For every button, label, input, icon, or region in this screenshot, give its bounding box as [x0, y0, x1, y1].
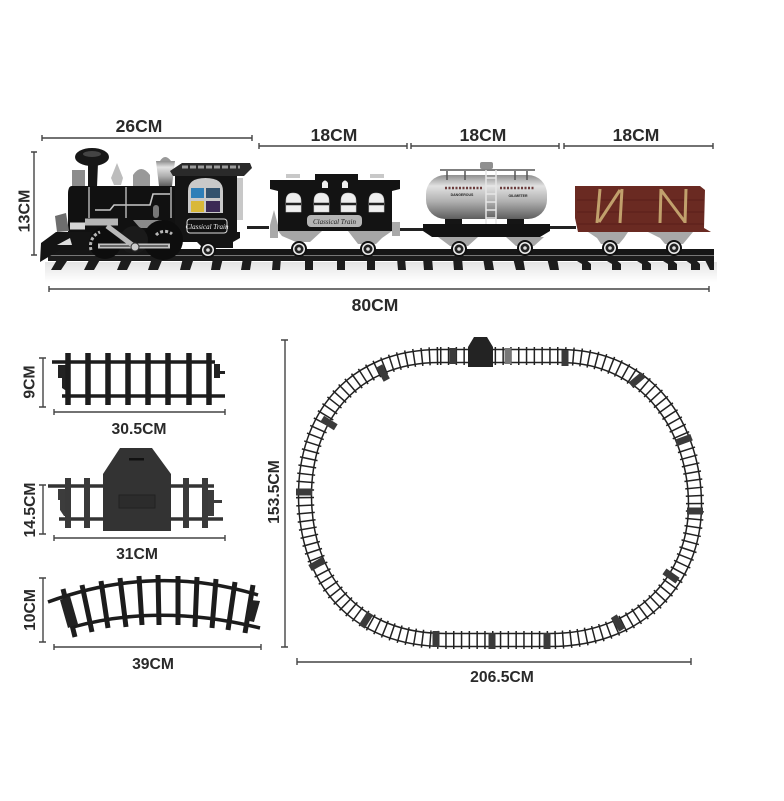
wood planks: [577, 200, 704, 224]
dimension: passenger car 18CM: 18CM: [311, 125, 357, 145]
wagon wheels: [602, 240, 682, 256]
coupler: [550, 226, 576, 229]
outer rail: [298, 350, 702, 646]
top rail: [440, 170, 535, 180]
passenger car: [270, 174, 400, 257]
dimension: train length 80CM: [49, 286, 709, 315]
boiler fittings: [89, 157, 175, 228]
dimension: oval height 153.5CM: [266, 340, 288, 647]
front lantern detail: [55, 213, 69, 232]
car end platforms: [270, 210, 400, 238]
hazard markings: DANGEROUS: [451, 193, 474, 197]
car name plate: Classical Train: [313, 218, 356, 226]
straight track piece: [52, 353, 225, 405]
roof highlight: [182, 166, 240, 168]
oval track layout: [296, 337, 703, 649]
dimension: connector track height 14.5CM: 14.5CM: [22, 483, 39, 537]
power connector track piece: [48, 448, 223, 531]
dimension: curved track width 39CM: [54, 644, 261, 673]
dimension: tank car 18CM: [411, 125, 559, 149]
car roof: [270, 174, 400, 231]
hazard markings: [445, 188, 535, 198]
connector housing: [103, 448, 171, 531]
roof vents: [286, 174, 384, 188]
boiler: [68, 186, 176, 232]
cab window: [188, 178, 223, 213]
cab name plate: [186, 219, 229, 233]
curved track piece: [48, 575, 260, 637]
dimension: box car 18CM: [564, 125, 713, 149]
ties: [305, 356, 695, 640]
locomotive chassis and cowcatcher: [40, 232, 240, 262]
wagon chassis: [588, 232, 693, 244]
tank car wheels: [451, 240, 533, 257]
cab: [175, 172, 237, 234]
smokestack: [72, 148, 109, 188]
dimension: oval width 206.5CM: [297, 658, 691, 686]
housing details: [119, 495, 155, 508]
tank car chassis: [438, 237, 544, 246]
dimension: box car 18CM: 18CM: [613, 125, 659, 145]
dimension: train length 80CM: 80CM: [352, 295, 398, 315]
locomotive: [40, 148, 252, 262]
power connector on oval: [468, 337, 493, 367]
cab side post: [237, 178, 243, 220]
coupler: [400, 228, 424, 231]
dimension: connector track width 31CM: 31CM: [116, 546, 158, 563]
dimension: straight track height 9CM: 9CM: [22, 365, 38, 399]
dimension: straight track height 9CM: [22, 358, 46, 407]
dimension: curved track width 39CM: 39CM: [132, 656, 174, 673]
cab name plate: Classical Train: [186, 223, 229, 231]
tank: [426, 175, 547, 219]
wagon body: [575, 186, 711, 232]
dome: [480, 162, 493, 169]
dimension: locomotive 26CM: [42, 116, 252, 141]
dimension: straight track width 30.5CM: 30.5CM: [112, 421, 166, 438]
dimension: locomotive 26CM: 26CM: [116, 116, 162, 136]
ladder: [486, 170, 496, 230]
car windows: [286, 193, 384, 212]
hazard markings: OIL/METER: [508, 194, 528, 198]
pilot wheel: [200, 242, 216, 258]
drive wheels: [89, 220, 183, 260]
pilot step: [57, 238, 72, 245]
inner rail: [312, 362, 688, 634]
car chassis: [278, 231, 392, 244]
track under the train: [45, 249, 717, 282]
coupler: [247, 226, 269, 229]
box car: [575, 186, 711, 256]
dimension: straight track width 30.5CM: [54, 409, 225, 438]
dimension: curved track height 10CM: [22, 578, 46, 642]
dimension: passenger car 18CM: [259, 125, 407, 149]
cab roof: [170, 163, 252, 176]
tank saddles: [445, 214, 524, 226]
silver piston rods: [70, 222, 170, 251]
joint blocks: [296, 348, 703, 649]
car wheels: [291, 241, 376, 257]
dimension: connector track width 31CM: [54, 535, 225, 563]
dimension: train height 13CM: 13CM: [16, 190, 34, 232]
dimension: oval height 153.5CM: 153.5CM: [266, 460, 283, 524]
tank car: [423, 162, 550, 257]
tank car deck: [423, 224, 550, 237]
dimension: train height 13CM: [16, 152, 37, 255]
dimension: curved track height 10CM: 10CM: [22, 589, 39, 631]
tan N braces: [597, 189, 686, 223]
dimension: tank car 18CM: 18CM: [460, 125, 506, 145]
dimension: oval width 206.5CM: 206.5CM: [470, 669, 534, 686]
